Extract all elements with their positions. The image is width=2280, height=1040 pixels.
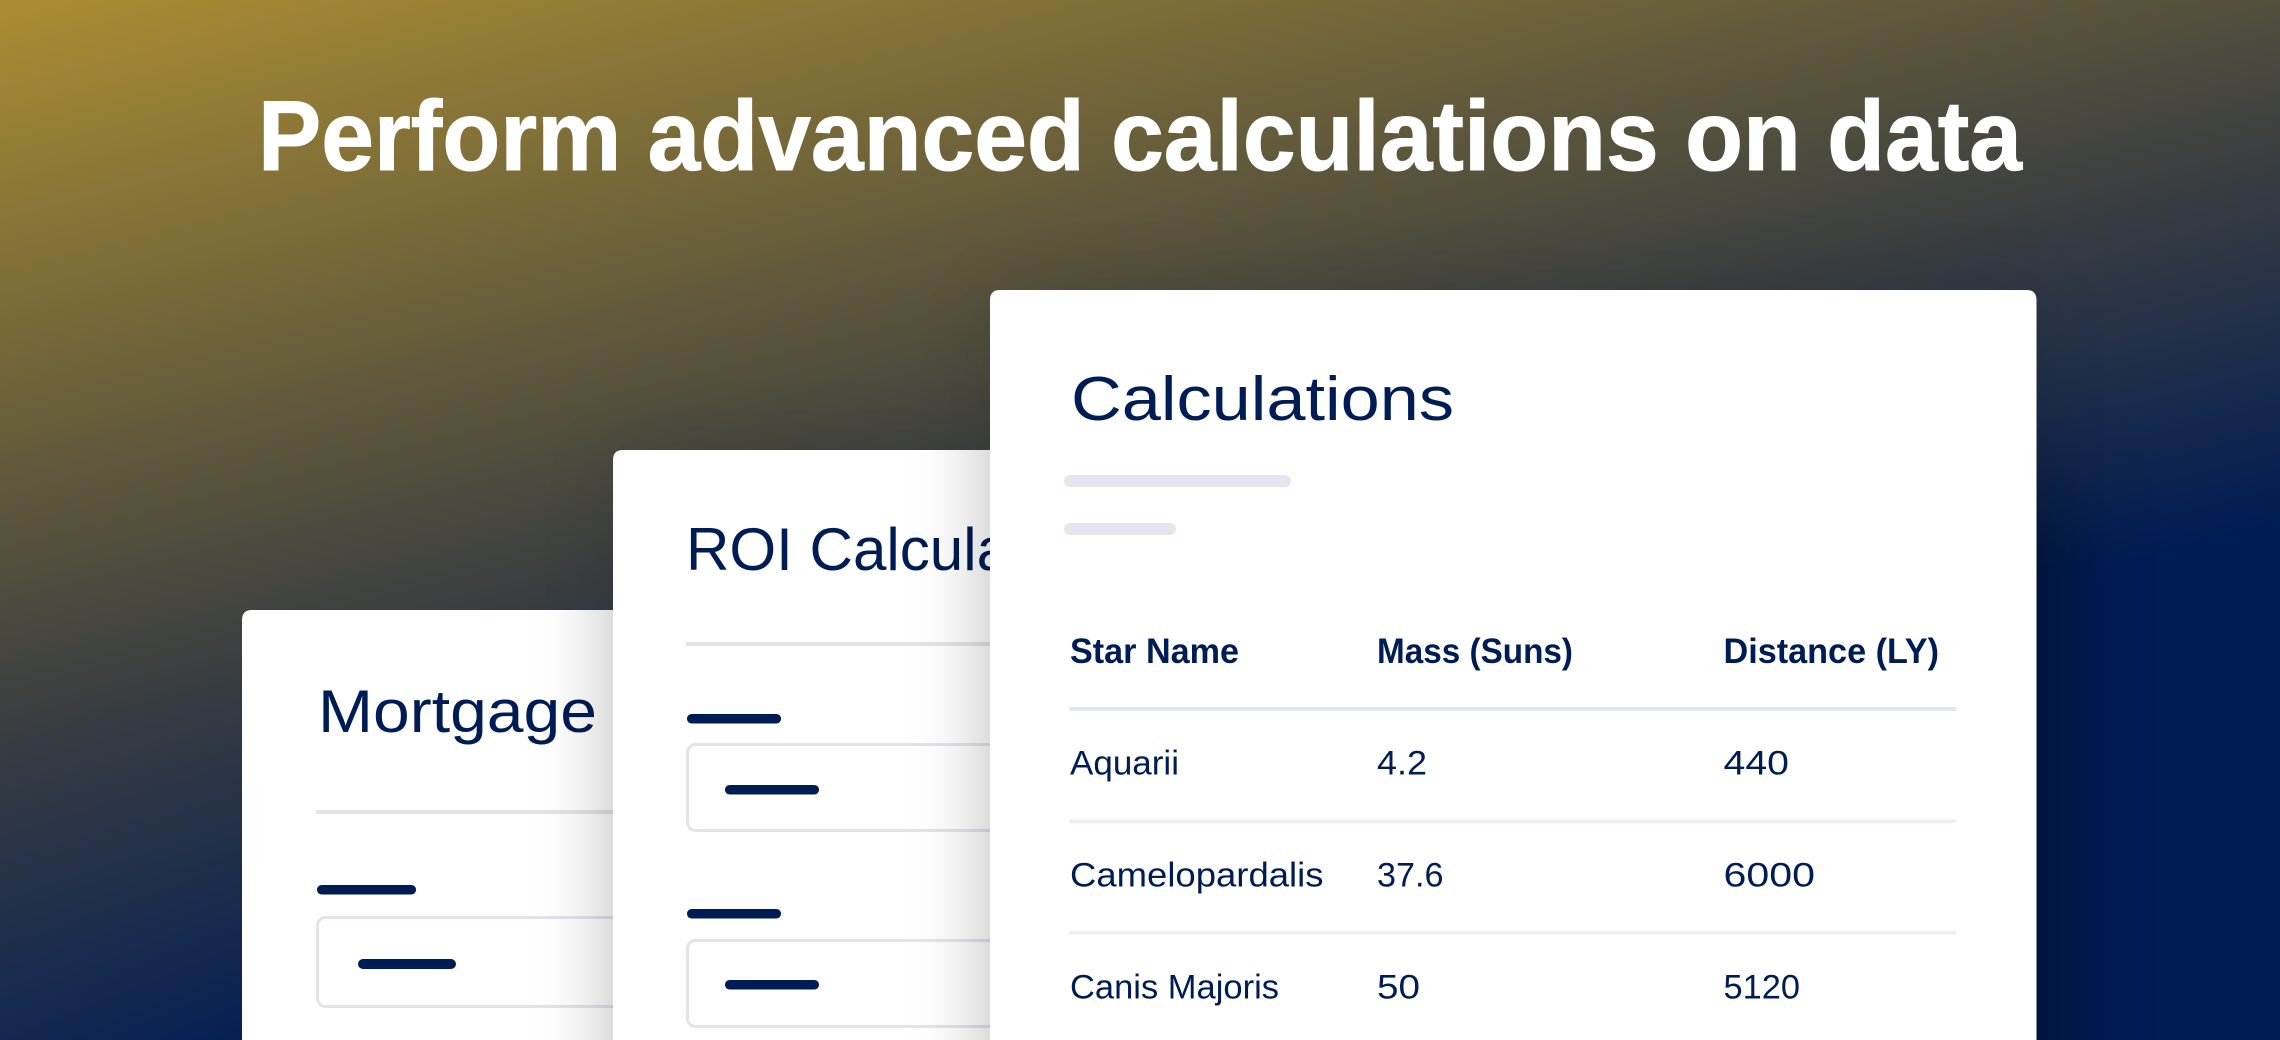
title: Perform advanced calculations on data [258,80,2023,191]
soft shadow behind ROI card [613,450,990,1040]
table header [1070,632,1939,671]
row: Camelopardalis [1070,856,1815,894]
table [1069,632,1956,1006]
row: Aquarii: Aquarii [1070,744,1179,782]
mortgage divider [316,810,716,814]
infographic canvas [242,98,2088,1040]
dark glow to the right of calculations card [1400,480,2037,1040]
row: Aquarii: 4.2 [1377,744,1427,782]
shadow cast by calculations card onto ROI card [946,450,990,1040]
shadow cast by ROI card onto mortgage card [569,610,613,1040]
panel: mortgage calculator card [242,610,742,1040]
row: Canis Majoris: Canis Majoris [1070,968,1279,1006]
ROI divider [686,642,1086,646]
table header: Mass (Suns) [1377,632,1573,671]
ROI form field two [687,909,1088,1026]
ROI form field one [687,714,1088,830]
header rule [1069,707,1956,711]
ROI card title: ROI Calcula [686,516,1011,583]
row: Camelopardalis: 6000 [1724,856,1815,894]
row rule [1069,820,1956,823]
panel: calculations card [990,290,2036,1040]
row: Canis Majoris: 50 [1377,968,1420,1006]
mortgage card title: Mortgage [318,678,597,745]
row: Camelopardalis: Camelopardalis [1070,856,1324,894]
placeholder line one [1064,475,1291,487]
mortgage form field [317,885,718,1006]
row: Canis Majoris: 5120 [1724,968,1800,1006]
row: Canis Majoris [1070,968,1800,1006]
soft shadow behind calculations card [990,290,2037,1040]
row: Aquarii [1070,744,1789,782]
row rule [1069,931,1956,934]
calculations title: Calculations [1071,365,1454,434]
panel: ROI calculator card [613,450,1113,1040]
placeholder line two [1064,523,1176,535]
table header: Star Name [1070,632,1239,671]
table header: Distance (LY) [1724,632,1939,671]
row: Camelopardalis: 37.6 [1377,856,1444,894]
row: Aquarii: 440 [1724,744,1789,782]
